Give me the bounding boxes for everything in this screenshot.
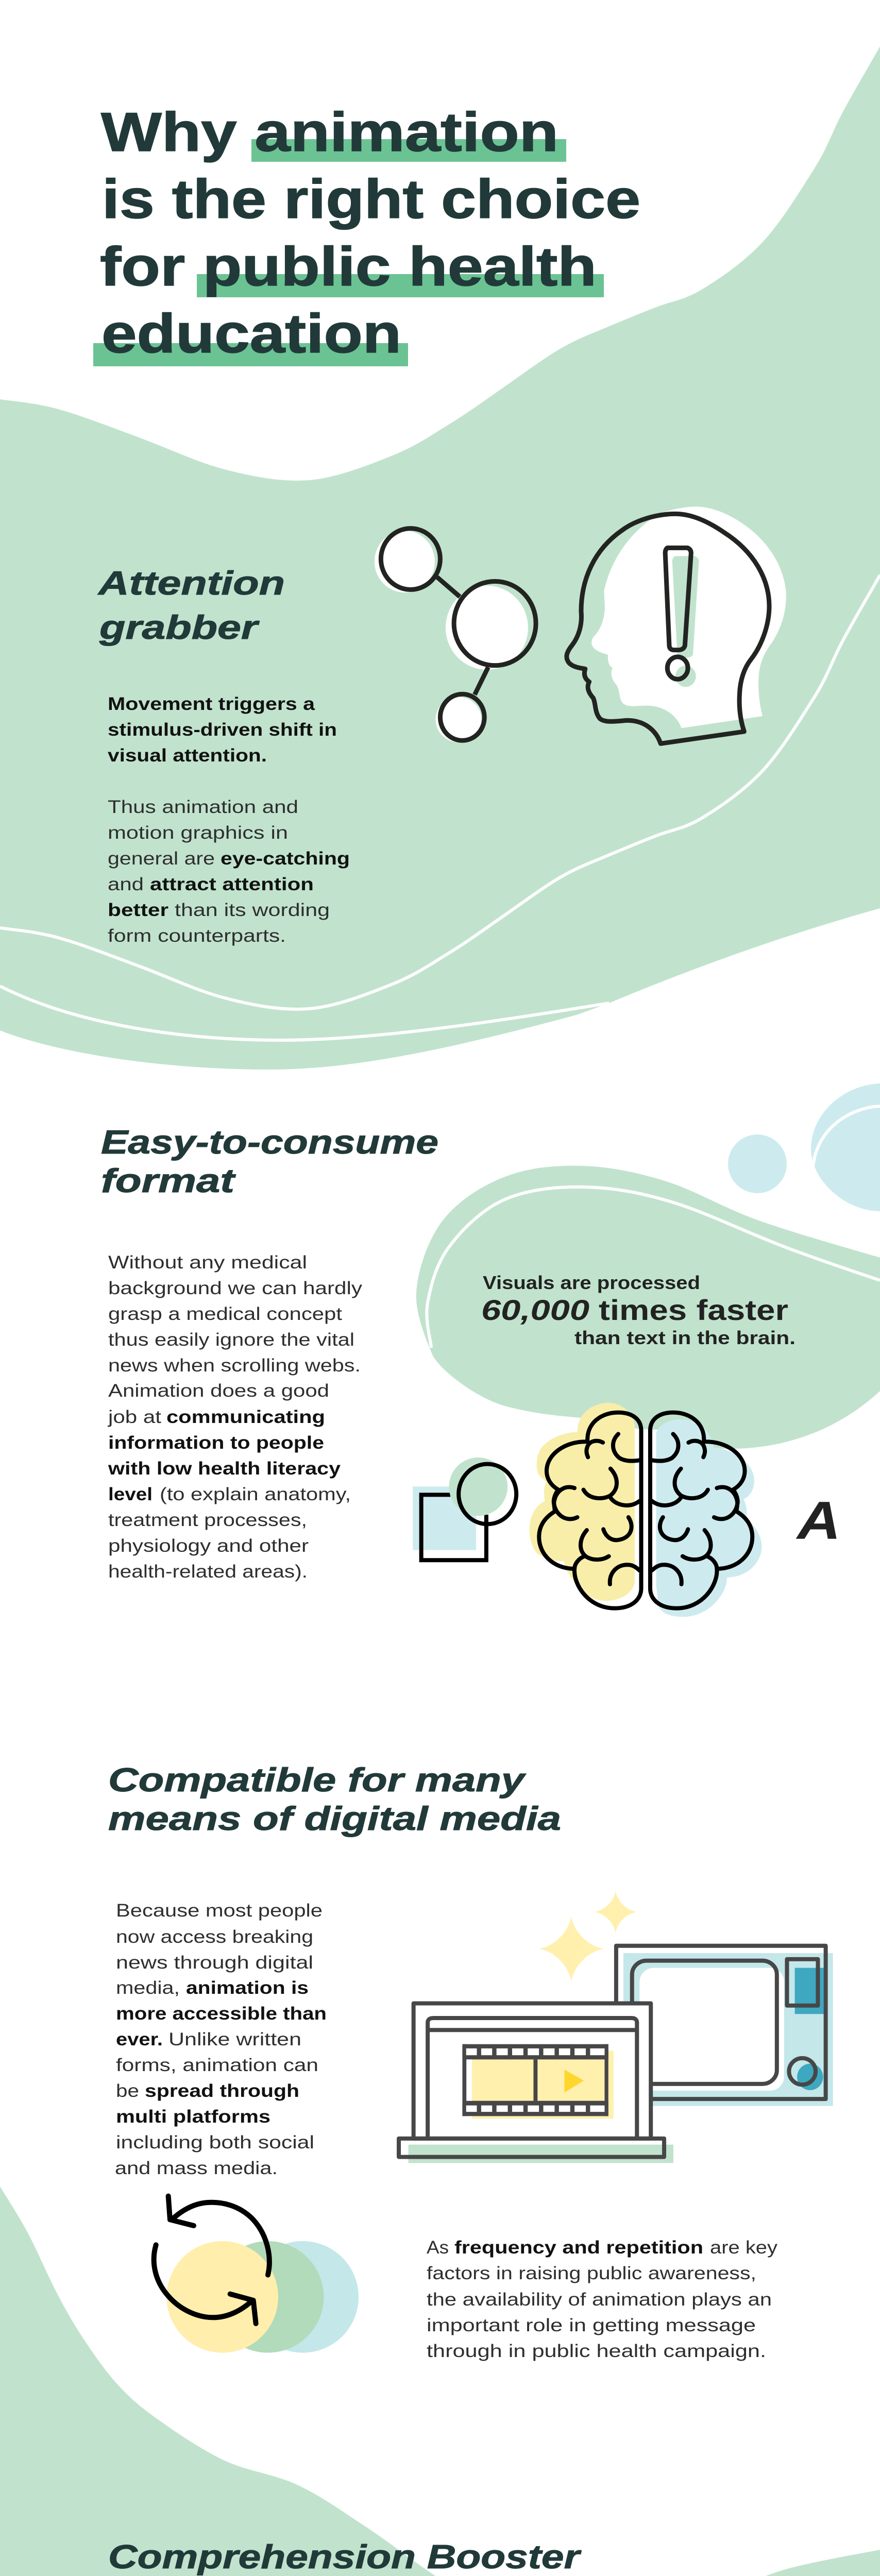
callout: visuals are processed 60,000 times faster: 60,000 [481,1294,589,1326]
text block: thus animation [108,797,350,946]
text block: movement triggers [108,694,337,766]
text block: because most people: media, [116,1978,180,1998]
heading: compatible for many means of digital media: means of digital media [108,1800,561,1837]
text block: because most people: animation is [186,1978,309,1998]
icon: letter A: A [796,1491,841,1551]
text block: frequency and repetition: frequency and repetition [454,2238,703,2258]
text block: because most people: and mass media. [115,2158,278,2178]
text block: because most people [115,1901,327,2178]
text block: without any medical background: physiology and other [108,1536,309,1556]
text block: without any medical background: communicating [166,1407,325,1427]
text block: because most people: be [116,2081,139,2101]
text block: movement triggers: visual attention. [108,745,267,766]
heading: easy-to-consume format: Easy-to-consume [101,1123,438,1161]
title [93,101,640,366]
text block: frequency and repetition: through in public health campaign. [427,2341,766,2361]
text block: thus animation: better [108,900,168,920]
text block: frequency and repetition: are key [710,2238,778,2258]
text block: because most people: Unlike written [168,2029,301,2049]
text block: because most people: ever. [116,2029,163,2049]
text block: frequency and repetition [427,2238,778,2361]
title: Why animation [101,101,559,163]
heading: attention grabber [97,564,285,646]
text block: without any medical background: thus easily ignore the vital [108,1330,354,1350]
heading: compatible for many means of digital media: Compatible for many [108,1761,527,1799]
text block: without any medical background: grasp a medical concept [108,1304,342,1324]
text block: because most people: multi platforms [116,2107,270,2127]
text block: because most people: more accessible than [116,2004,327,2024]
icon: sparkles [539,1891,637,1981]
icon: head with exclamation mark [567,506,786,743]
icon: brain [530,1403,762,1617]
icon: repeat arrows over circles [154,2196,359,2353]
text block: because most people: Because most people [116,1901,323,1921]
text block: frequency and repetition: important role in getting message [427,2315,756,2335]
background: top green wave [0,46,880,1070]
text block: without any medical background: information to people [108,1433,324,1453]
text block: without any medical background: news when scrolling webs. [108,1355,361,1376]
text block: without any medical background: Animation does a good [108,1381,329,1401]
title: education [101,302,401,364]
text block: without any medical background: with low health literacy [108,1459,341,1479]
icon: laptop with film strip [399,2003,673,2163]
text block: thus animation: than its wording [175,900,330,920]
text block: frequency and repetition: As [427,2238,449,2258]
heading: easy-to-consume format: format [101,1162,236,1199]
heading: easy-to-consume format [101,1123,438,1199]
icon: television [616,1946,833,2106]
text block: without any medical background [108,1252,363,1582]
icon: network of circles [375,529,536,742]
icon: shapes square and circle [413,1458,516,1560]
panel: green callout blob [416,1166,880,1449]
decoration: blue circles top right [728,1083,880,1211]
text block: movement triggers: Movement triggers a [108,694,315,714]
heading: comprehension booster: Comprehension Booster [108,2538,582,2575]
text block: without any medical background: job at [108,1407,161,1427]
text block: without any medical background: background we can hardly [108,1278,363,1298]
heading: compatible for many means of digital media [108,1761,561,1837]
heading: attention grabber: Attention [97,564,285,602]
callout: visuals are processed 60,000 times faster: times faster [599,1294,788,1326]
text block: frequency and repetition: the availability of animation plays an [427,2290,772,2310]
text block: thus animation: attract attention [150,874,314,894]
text block: thus animation: and [108,874,144,894]
callout: visuals are processed 60,000 times faster: Visuals are processed [483,1272,700,1293]
text block: thus animation: motion graphics in [108,823,288,843]
text block: without any medical background: treatment processes, [108,1510,307,1530]
text block: because most people: news through digital [116,1953,313,1973]
text block: thus animation: eye-catching [221,849,350,869]
callout: visuals are processed 60,000 times faster [481,1272,796,1348]
title: is the right choice [102,168,640,230]
text block: frequency and repetition: factors in raising public awareness, [427,2263,756,2283]
text block: without any medical background: level [108,1484,153,1504]
text block: movement triggers: stimulus-driven shift in [108,720,337,740]
heading: attention grabber: grabber [99,608,260,646]
text block: thus animation: form counterparts. [108,926,286,946]
callout: visuals are processed 60,000 times faster: than text in the brain. [574,1327,796,1348]
text block: because most people: forms, animation can [116,2055,318,2075]
text block: because most people: including both social [116,2132,314,2153]
text block: thus animation: general are [108,849,215,869]
text block: because most people: spread through [145,2081,299,2101]
text block: without any medical background: Without any medical [108,1252,307,1273]
text block: because most people: now access breaking [116,1927,313,1947]
title: for public health [100,235,597,297]
background: lower green wave [0,2187,880,2576]
text block: without any medical background: health-related areas). [108,1562,308,1582]
text block: thus animation: Thus animation and [108,797,298,817]
text block: without any medical background: (to explain anatomy, [160,1484,351,1504]
